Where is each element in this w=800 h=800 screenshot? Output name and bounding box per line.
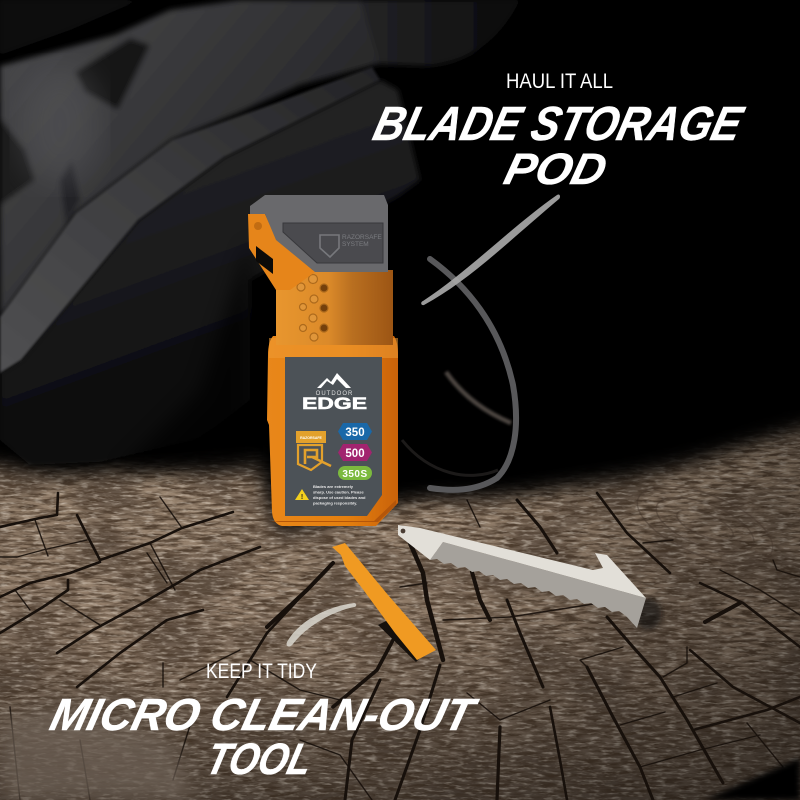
padded roll band bbox=[0, 67, 380, 373]
grey cap bbox=[250, 195, 388, 272]
warning text: packaging responsibly. bbox=[313, 500, 357, 506]
title: blade storage: BLADE STORAGE bbox=[368, 98, 749, 151]
jacket lower body bbox=[0, 80, 420, 465]
lens ring bbox=[402, 259, 516, 490]
cap logo bbox=[320, 234, 382, 257]
micro clean-out tool bbox=[332, 543, 436, 662]
bottom left haze bbox=[0, 705, 200, 800]
heading group: blade storage pod bbox=[368, 69, 749, 194]
cast shadow over wood bbox=[0, 0, 800, 530]
wood stump surface bbox=[0, 410, 800, 800]
razorsafe badge bbox=[296, 431, 331, 470]
storage holes bbox=[297, 264, 328, 341]
eyebrow: keep it tidy: KEEP IT TIDY bbox=[206, 659, 317, 683]
jacket highlight patch bbox=[18, 65, 102, 185]
cap textured panel bbox=[283, 223, 383, 263]
product label bbox=[285, 357, 382, 516]
jacket side shadow bbox=[120, 240, 250, 470]
upper fabric bbox=[0, 0, 520, 318]
badge 350: 350 bbox=[345, 427, 365, 439]
cap logo: SYSTEM bbox=[342, 241, 369, 248]
jacket fabric bbox=[0, 0, 520, 470]
warning icon bbox=[295, 489, 309, 501]
heading group: micro clean-out tool bbox=[46, 659, 483, 784]
title: micro clean-out: MICRO CLEAN-OUT bbox=[46, 690, 483, 740]
pod upper translucent body bbox=[276, 270, 393, 345]
bottom corner shadow bbox=[705, 758, 800, 800]
label logo: OUTDOOR bbox=[316, 391, 353, 397]
pod lower case bbox=[267, 336, 398, 526]
cap logo: RAZORSAFE bbox=[342, 234, 382, 241]
orange clip arm bbox=[248, 214, 315, 290]
warning text: Blades are extremely bbox=[313, 484, 354, 489]
razorsafe badge: RAZORSAFE bbox=[300, 436, 323, 440]
knot ring bbox=[627, 470, 783, 580]
wood cracks bbox=[0, 493, 800, 800]
label logo: EDGE bbox=[302, 394, 367, 413]
badge 500 bbox=[338, 444, 372, 461]
warning text: dispose of used blades and bbox=[313, 495, 366, 500]
title: tool: TOOL bbox=[202, 736, 318, 784]
saw blade bbox=[398, 525, 662, 630]
badge 350 bbox=[338, 423, 372, 440]
warning text: sharp. Use caution. Please bbox=[313, 490, 364, 494]
callout stroke: storage pod bbox=[421, 194, 560, 305]
badge 350S: 350S bbox=[342, 469, 368, 480]
storage pod bbox=[248, 195, 398, 526]
callout stroke: clean-out tool bbox=[287, 603, 356, 646]
eyebrow: haul it all: HAUL IT ALL bbox=[506, 69, 613, 93]
badge 350S bbox=[338, 466, 372, 480]
warning icon: ! bbox=[301, 494, 303, 501]
label logo bbox=[302, 373, 367, 413]
badge 500: 500 bbox=[345, 448, 365, 460]
title: pod: POD bbox=[500, 146, 612, 194]
